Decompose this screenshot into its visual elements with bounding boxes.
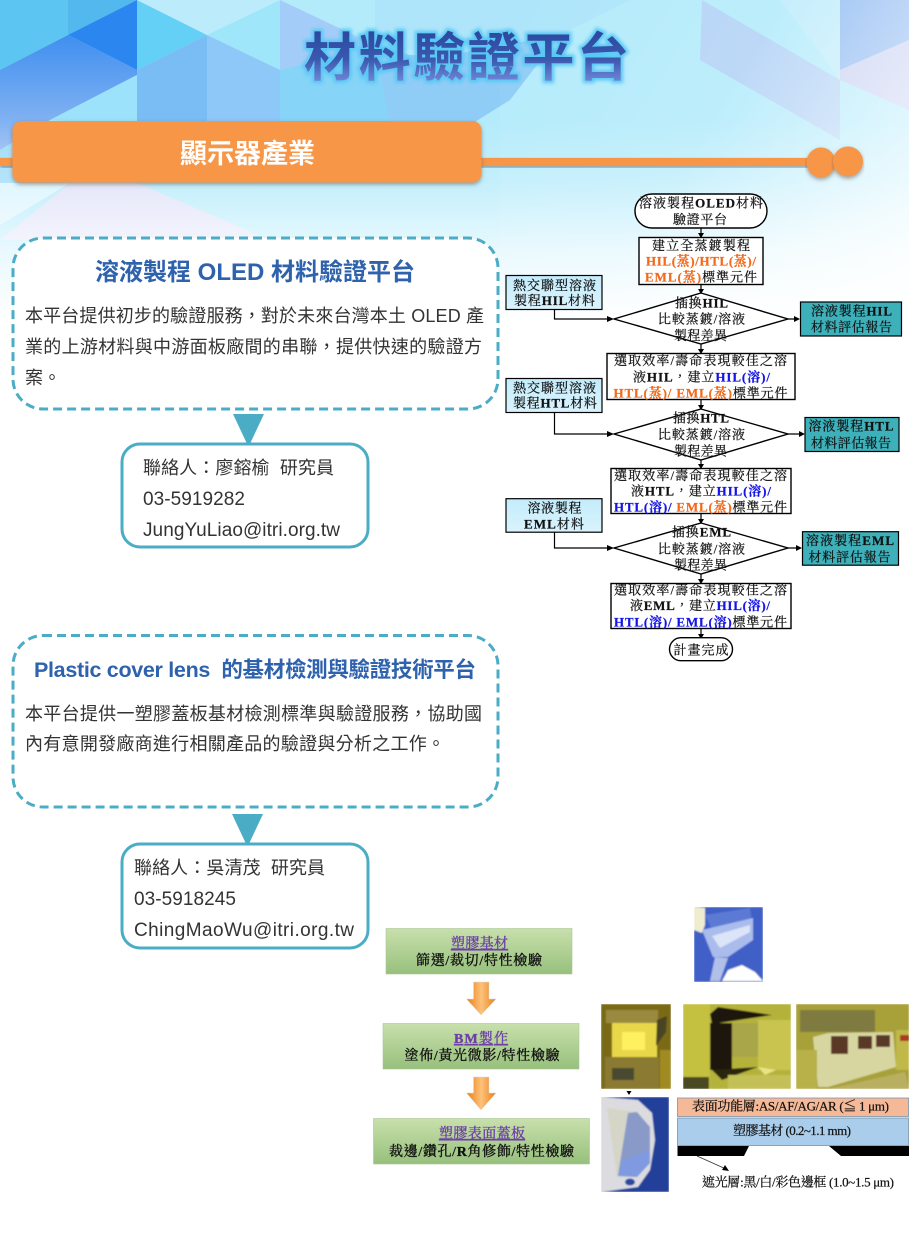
input: EML material: EML材料 xyxy=(524,516,584,531)
step: HTL selection: 液HTL，建立HIL(溶)/ xyxy=(631,484,771,499)
diagram: plastic cover layer structure xyxy=(678,1098,909,1190)
step: plastic cover panel: 塑膠表面蓋板 xyxy=(439,1125,525,1142)
title: 材料驗證平台 xyxy=(304,30,629,88)
step: EML selection: HTL(溶)/ EML(溶)標準元件 xyxy=(614,615,787,630)
start node: 驗證平台 xyxy=(672,212,727,227)
step: HTL selection: HTL(溶)/ EML(蒸)標準元件 xyxy=(614,500,787,515)
contact card 2: ChingMaoWu@itri.org.tw xyxy=(134,920,354,941)
decision: EML: 插換EML xyxy=(672,525,731,540)
step: plastic substrate: 篩選/裁切/特性檢驗 xyxy=(416,952,543,969)
panel: solution-process OLED platform xyxy=(13,238,498,409)
step: HIL selection: HTL(蒸)/ EML(蒸)標準元件 xyxy=(614,385,788,400)
start node xyxy=(635,194,767,228)
panel body text: 業的上游材料與中游面板廠間的串聯，提供快速的驗證方 xyxy=(25,336,482,357)
photo: yellow-light coating tool xyxy=(601,1004,671,1089)
arrow: panel to contact xyxy=(232,814,263,847)
decision: HIL: 插換HIL xyxy=(675,296,728,311)
input: EML material xyxy=(506,499,602,532)
contact card 1: JungYuLiao@itri.org.tw xyxy=(143,520,340,541)
decision: HIL: 比較蒸鍍/溶液 xyxy=(658,312,745,327)
input: HIL material: 熱交聯型溶液 xyxy=(513,278,596,293)
panel body text xyxy=(25,704,482,754)
step: full evaporation device: EML(蒸)標準元件 xyxy=(645,270,757,285)
panel body text: 本平台提供初步的驗證服務，對於未來台灣本土 OLED 產 xyxy=(25,306,484,326)
end node xyxy=(670,638,732,661)
output: HIL report: 材料評估報告 xyxy=(811,320,892,335)
photo: yellow-room equipment xyxy=(683,1004,791,1089)
arrow: down xyxy=(466,1077,496,1110)
step: HIL selection: 選取效率/壽命表現較佳之溶 xyxy=(614,353,787,368)
panel body text: 本平台提供一塑膠蓋板基材檢測標準與驗證服務，協助國 xyxy=(25,704,482,724)
output: HIL report: 溶液製程HIL xyxy=(811,304,892,319)
contact card 1 xyxy=(122,444,368,547)
output: HTL report: 溶液製程HTL xyxy=(808,419,894,434)
section banner: 顯示器產業: 顯示器產業 xyxy=(180,139,315,169)
section banner: 顯示器產業 xyxy=(0,121,863,182)
contact card 2 xyxy=(122,844,368,948)
input: HTL material: 熱交聯型溶液 xyxy=(513,380,596,395)
decision: EML: 製程差異 xyxy=(674,557,728,572)
connectors xyxy=(554,228,805,639)
title: 材料驗證平台 xyxy=(304,30,629,88)
decision: HTL xyxy=(614,409,788,460)
arrow: down xyxy=(466,982,496,1015)
photo: flexible plastic film xyxy=(694,907,763,982)
step: HIL selection: 液HIL，建立HIL(溶)/ xyxy=(633,370,770,385)
decision: EML: 比較蒸鍍/溶液 xyxy=(658,541,745,556)
background: faceted blue pattern xyxy=(0,0,909,320)
contact card 1: 聯絡人：廖鎔榆 研究員 xyxy=(143,458,334,478)
photo: plastic cover sample xyxy=(601,1091,669,1192)
output: EML report: 溶液製程EML xyxy=(806,533,894,548)
step: plastic cover panel: 裁邊/鑽孔/R角修飾/特性檢驗 xyxy=(389,1143,575,1160)
step: plastic cover panel xyxy=(374,1118,590,1164)
photo: cleaning line equipment xyxy=(796,1004,909,1089)
arrow: panel to contact xyxy=(233,414,264,447)
output: HTL report: 材料評估報告 xyxy=(811,435,891,450)
output: HTL report xyxy=(805,418,899,452)
output: EML report xyxy=(802,532,898,565)
end node: 計畫完成 xyxy=(674,642,728,657)
layer: plastic substrate: 塑膠基材 (0.2~1.1 mm) xyxy=(733,1123,851,1138)
contact card 2: 03-5918245 xyxy=(134,889,236,910)
input: HIL material xyxy=(506,276,602,310)
output: HIL report xyxy=(800,302,902,336)
layer: plastic substrate xyxy=(678,1118,908,1146)
layer: surface function: 表面功能層:AS/AF/AG/AR (≦ 1 μm) xyxy=(692,1099,889,1114)
step: EML selection: 液EML，建立HIL(溶)/ xyxy=(630,598,770,613)
step: BM fabrication: 塗佈/黃光微影/特性檢驗 xyxy=(404,1047,560,1064)
label: light-shield layer: 遮光層:黑/白/彩色邊框 (1.0~1.5 μm) xyxy=(702,1175,894,1190)
step: HTL selection: 選取效率/壽命表現較佳之溶 xyxy=(614,468,787,483)
step: HIL selection xyxy=(607,353,795,400)
panel: plastic cover lens platform xyxy=(13,636,498,807)
decision: HTL: 插換HTL xyxy=(673,410,729,425)
input: EML material: 溶液製程 xyxy=(528,501,582,516)
input: HIL material: 製程HIL材料 xyxy=(514,293,595,308)
contact card 1: 03-5919282 xyxy=(143,489,245,510)
step: EML selection xyxy=(611,582,791,630)
panel heading: Plastic cover lens 的基材檢測與驗證技術平台 xyxy=(34,657,476,682)
panel body text: 案。 xyxy=(25,368,61,388)
decision: HIL: 製程差異 xyxy=(674,328,728,343)
step: plastic substrate xyxy=(386,928,572,974)
step: full evaporation device xyxy=(639,238,763,285)
layer: surface function xyxy=(678,1098,908,1116)
step: BM fabrication: BM製作 xyxy=(454,1030,508,1047)
decision: HIL xyxy=(614,293,788,344)
step: EML selection: 選取效率/壽命表現較佳之溶 xyxy=(614,582,787,597)
layer: black matrix xyxy=(678,1146,909,1156)
flowchart: OLED validation process xyxy=(506,194,902,661)
input: HTL material xyxy=(506,378,602,412)
decision: HTL: 製程差異 xyxy=(674,444,728,459)
step: HTL selection xyxy=(611,468,791,515)
decision: EML xyxy=(614,523,788,574)
step: BM fabrication xyxy=(383,1024,579,1069)
panel body text xyxy=(25,306,484,388)
contact card 2: 聯絡人：吳清茂 研究員 xyxy=(134,858,325,878)
step: full evaporation device: 建立全蒸鍍製程 xyxy=(652,238,750,253)
input: HTL material: 製程HTL材料 xyxy=(513,396,597,411)
panel body text: 內有意開發廠商進行相關產品的驗證與分析之工作。 xyxy=(25,733,445,754)
step: plastic substrate: 塑膠基材 xyxy=(451,935,508,952)
process flow: plastic cover lens xyxy=(374,928,590,1164)
output: EML report: 材料評估報告 xyxy=(808,550,890,565)
step: full evaporation device: HIL(蒸)/HTL(蒸)/ xyxy=(646,254,756,269)
decision: HTL: 比較蒸鍍/溶液 xyxy=(658,427,745,442)
start node: 溶液製程OLED材料 xyxy=(639,196,763,211)
panel heading: 溶液製程 OLED 材料驗證平台 xyxy=(95,258,415,286)
arrow: to light-shield label xyxy=(697,1156,729,1171)
